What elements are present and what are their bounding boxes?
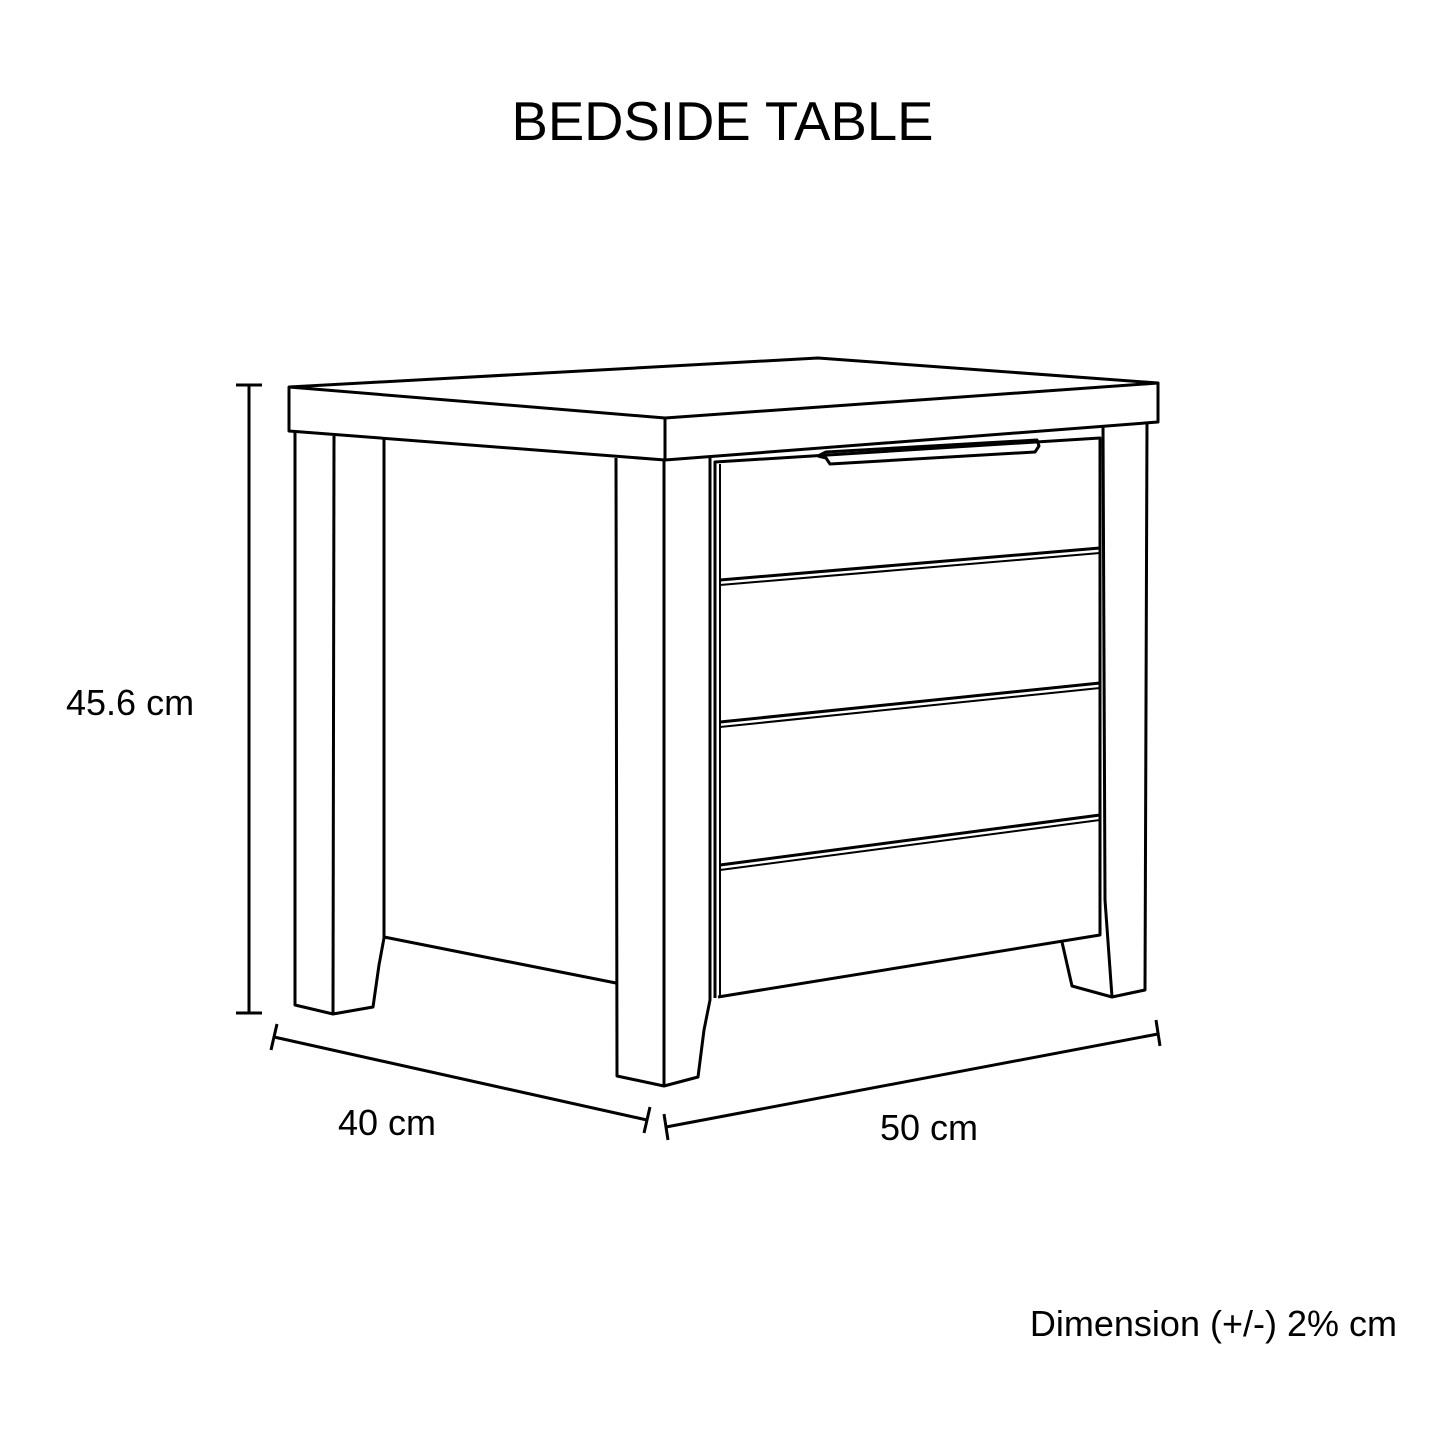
drawer fronts (715, 438, 1100, 998)
dimension: width (664, 1020, 1160, 1140)
label: height: 45.6 cm (66, 682, 194, 723)
label: width: 50 cm (880, 1107, 978, 1148)
dimension: depth (271, 1024, 650, 1133)
dimension: height (236, 385, 262, 1013)
drawer handle (818, 440, 1039, 464)
footnote: Dimension (+/-) 2% cm (1030, 1303, 1397, 1344)
table top (289, 358, 1158, 460)
right leg (1062, 422, 1147, 997)
left back leg (295, 432, 384, 1014)
side panel (384, 937, 616, 983)
front leg (616, 458, 710, 1086)
label: depth: 40 cm (338, 1102, 436, 1143)
title: BEDSIDE TABLE (511, 91, 934, 152)
